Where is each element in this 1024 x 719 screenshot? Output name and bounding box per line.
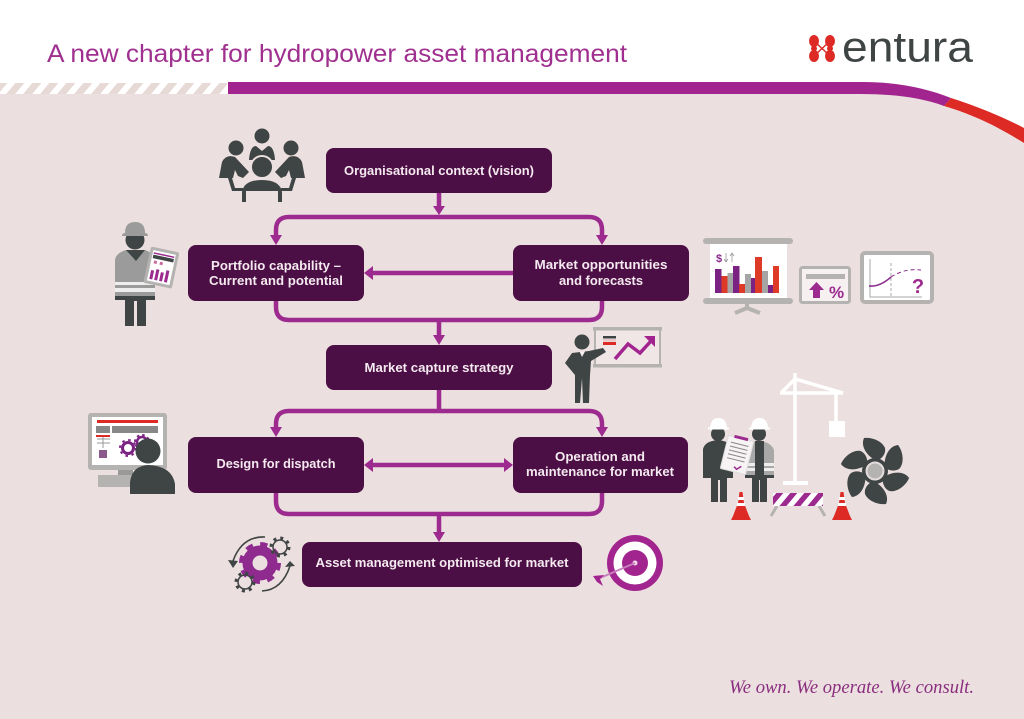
- box: portfolio capability: [188, 245, 364, 301]
- icon: forecast chart: ?: [912, 276, 924, 298]
- box: organisational context: Organisational context (vision): [344, 164, 534, 178]
- box: design for dispatch: Design for dispatch: [216, 457, 336, 471]
- small gears: [120, 435, 149, 456]
- box: operation and maintenance: [513, 437, 688, 493]
- box: market capture strategy: [326, 345, 552, 390]
- icon: meeting group: [219, 128, 305, 202]
- clipboard: [720, 433, 754, 475]
- worker head: [126, 230, 144, 250]
- board lines: [603, 336, 616, 345]
- arrow: market to portfolio: [372, 271, 513, 275]
- box: design for dispatch: [188, 437, 364, 493]
- title: A new chapter for hydropower asset management: [47, 40, 627, 68]
- box: portfolio capability: Portfolio capability –: [211, 259, 341, 273]
- box: asset management: [302, 542, 582, 587]
- presenter: [565, 334, 606, 403]
- top loop: [276, 217, 602, 238]
- user: [130, 465, 175, 494]
- icon: presentation bar chart: [703, 238, 793, 313]
- lower loop two: [276, 493, 602, 514]
- logo wordmark: entura: [842, 24, 973, 72]
- second top loop: [276, 411, 602, 430]
- barricade: [771, 493, 825, 516]
- box: operation and maintenance: maintenance for market: [526, 465, 675, 479]
- arrow: [600, 563, 635, 578]
- box: market opportunities: and forecasts: [559, 274, 643, 288]
- icon: turbine: [840, 438, 910, 504]
- lower loop one: [276, 301, 602, 320]
- icon: target with arrow: [593, 535, 663, 591]
- arrow: loop to strategy: [437, 320, 441, 338]
- cycle arrows: [233, 537, 290, 591]
- logo mark: [809, 35, 835, 62]
- box: portfolio capability: Current and potential: [209, 274, 343, 288]
- icon: monitor and user: [88, 413, 175, 494]
- icon: percentage rise: [800, 268, 850, 302]
- arrowheads: [270, 206, 608, 542]
- icon: construction team and crane: [703, 373, 910, 520]
- icon: forecast chart: [862, 253, 932, 302]
- hatched band: [0, 83, 228, 94]
- connectors and arrows: [276, 193, 602, 535]
- board: [593, 327, 662, 368]
- tablet: [143, 246, 179, 289]
- red band: [944, 98, 1024, 143]
- icon: gears and cycle: [228, 537, 295, 591]
- dollar sign: $: [716, 253, 722, 265]
- left worker: [703, 427, 733, 502]
- double arrow: design and operation: [372, 463, 505, 467]
- icon: presenter with board: [565, 327, 662, 403]
- tagline: We own. We operate. We consult.: [729, 677, 974, 698]
- box: market opportunities: [513, 245, 689, 301]
- worker body: [115, 250, 155, 326]
- traffic cone left: [731, 492, 751, 520]
- arrow: strategy to loop: [437, 390, 441, 411]
- crane: [780, 373, 845, 485]
- trend arrow head: [644, 336, 655, 347]
- hard hat: [122, 222, 148, 236]
- box: market opportunities: Market opportunities: [534, 258, 668, 272]
- box: market capture strategy: Market capture strategy: [364, 361, 514, 375]
- box: organisational context: [326, 148, 552, 193]
- worker jacket: [115, 250, 155, 298]
- purple band: [228, 82, 951, 106]
- icon: percentage rise: %: [829, 283, 844, 302]
- logo: entura: [809, 24, 973, 72]
- traffic cone right: [832, 492, 852, 520]
- main gear: [242, 545, 278, 581]
- trend arrow: [615, 341, 651, 359]
- small gears: [236, 538, 289, 591]
- box: operation and maintenance: Operation and: [555, 450, 645, 464]
- arrow: context to loop: [437, 193, 441, 208]
- box: asset management: Asset management optimised for market: [316, 556, 569, 570]
- bars: [715, 257, 779, 293]
- icon: worker with tablet: [115, 222, 179, 326]
- reflective stripes: [115, 282, 155, 292]
- right worker: [745, 427, 774, 502]
- hard hats: [708, 418, 770, 430]
- arrow: loop to asset management: [437, 514, 441, 535]
